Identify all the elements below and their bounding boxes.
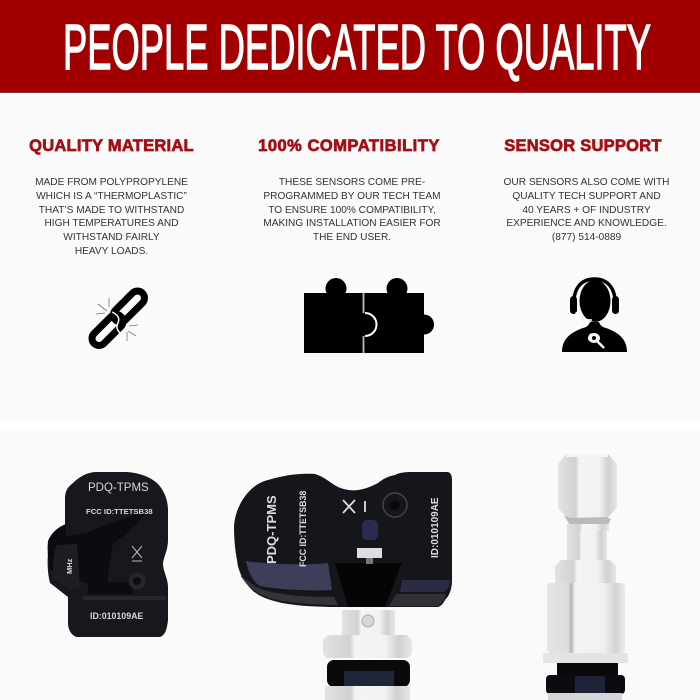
text: sensor support: (877) 514-0889 [552,232,621,243]
text: compatibility: TO ENSURE 100% COMPATIBILITY, [268,205,436,216]
icon: chain link [89,288,147,348]
band: content background [0,93,700,423]
text: sensor support [504,177,669,243]
icon: support agent [562,279,627,352]
text: quality material: WHICH IS A “THERMOPLASTIC” [36,191,187,202]
stem labels [264,491,441,567]
text: compatibility: PROGRAMMED BY OUR TECH TEAM [263,191,441,202]
photo: sensor with stem [234,472,452,700]
text: quality material: WITHSTAND FAIRLY [63,232,160,243]
band: product photo background [0,431,700,700]
text: quality material [35,177,188,257]
sensor labels: MHz [65,558,74,574]
text: compatibility: THE END USER. [313,232,391,243]
text: quality material: HIGH TEMPERATURES AND [44,218,179,229]
stem labels: PDQ-TPMS [264,495,279,564]
text: compatibility: MAKING INSTALLATION EASIER FOR [263,218,441,229]
text: compatibility [263,177,441,243]
heading: quality material: QUALITY MATERIAL [29,137,194,155]
stem labels: FCC ID:TTETSB38 [298,491,308,567]
stem labels: ID:010109AE [430,497,441,558]
icon: puzzle pieces [304,278,434,353]
header banner [0,0,700,93]
text: sensor support: OUR SENSORS ALSO COME WITH [504,177,669,188]
text: quality material: HEAVY LOADS. [75,246,148,257]
sensor labels: ID:010109AE [90,611,143,621]
sensor labels [65,482,153,621]
heading: sensor support: SENSOR SUPPORT [504,137,662,155]
text: quality material: THAT’S MADE TO WITHSTAND [39,205,184,216]
sensor labels: FCC ID:TTETSB38 [86,507,153,516]
text: sensor support: QUALITY TECH SUPPORT AND [512,191,661,202]
photo: sensor front [48,472,168,637]
text: compatibility: THESE SENSORS COME PRE- [279,177,425,188]
heading: compatibility: 100% COMPATIBILITY [258,137,440,155]
text: sensor support: EXPERIENCE AND KNOWLEDGE. [506,218,667,229]
text: quality material: MADE FROM POLYPROPYLENE [35,177,188,188]
text: sensor support: 40 YEARS + OF INDUSTRY [522,205,651,216]
photo: valve stem [543,454,628,700]
sensor labels: PDQ-TPMS [88,482,149,494]
